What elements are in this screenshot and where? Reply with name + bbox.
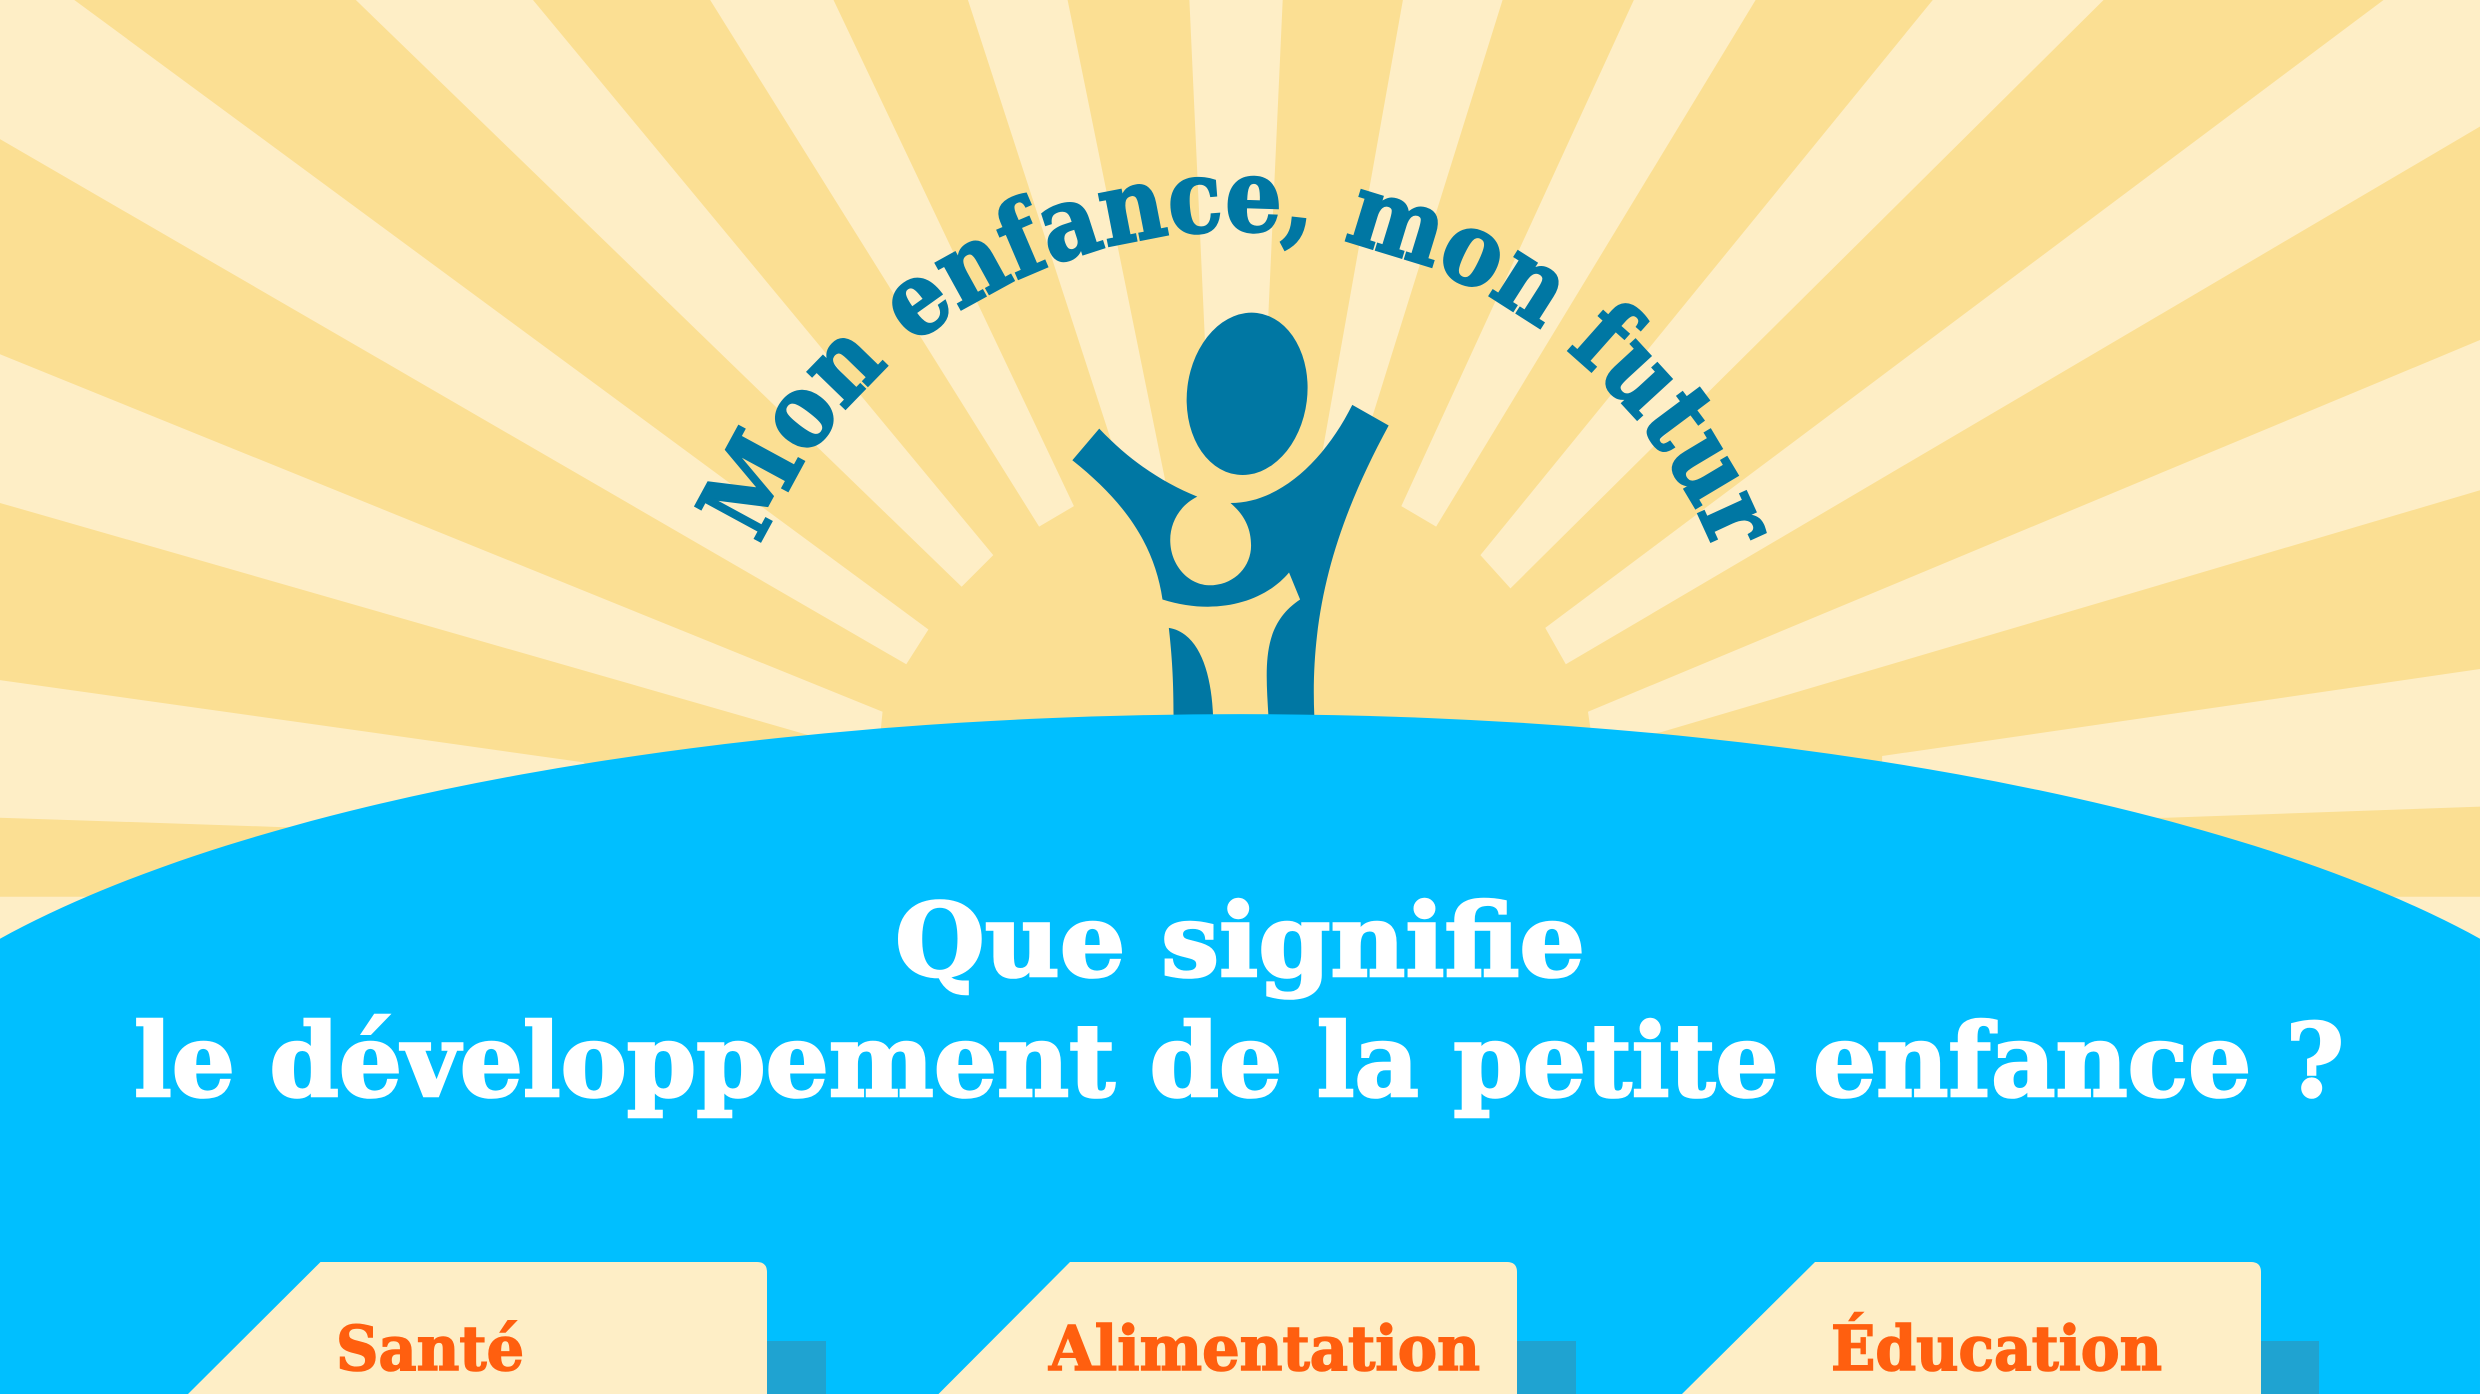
card: Éducation: Éducation (1831, 1312, 2162, 1385)
card: Éducation (1682, 1262, 2319, 1394)
card: Santé (188, 1262, 826, 1394)
blue hill (0, 714, 2480, 1394)
arched title: Mon enfance, mon futur (694, 176, 1767, 543)
card: Alimentation (938, 1262, 1576, 1394)
main heading: Que signifie (895, 881, 1585, 1000)
card: Santé: Santé (336, 1312, 524, 1385)
main heading: le développement de la petite enfance ? (134, 1001, 2344, 1120)
child figure logo (1072, 306, 1389, 716)
main heading (134, 881, 2344, 1120)
card: Alimentation: Alimentation (1048, 1312, 1480, 1385)
